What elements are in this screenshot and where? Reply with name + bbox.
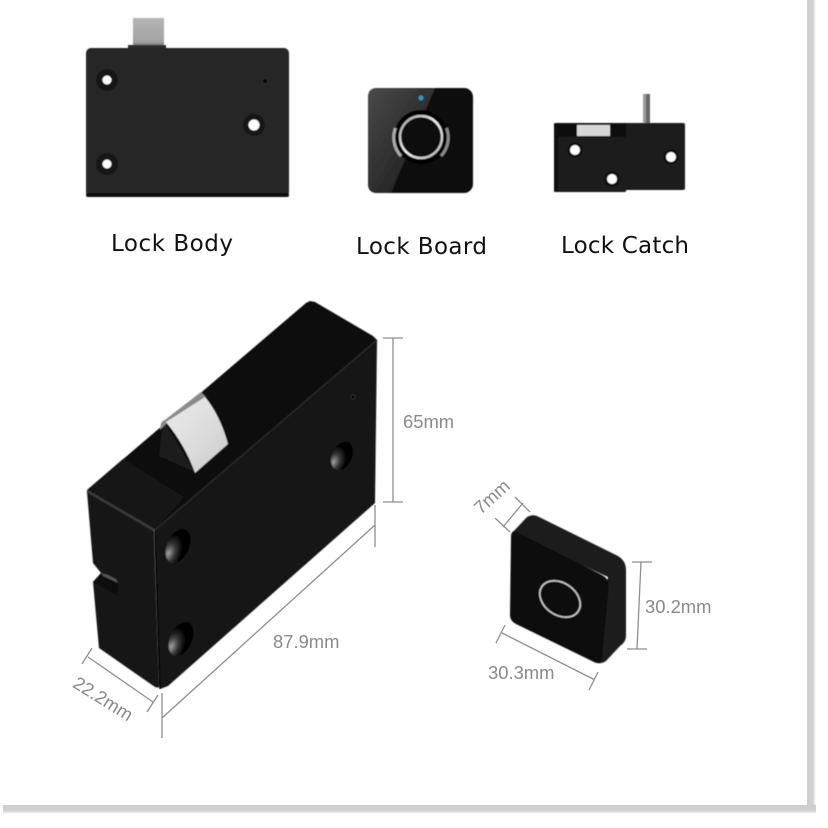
lock catch photo xyxy=(554,94,685,192)
large lock body 3D view xyxy=(87,301,377,689)
label: lock body: Lock Body xyxy=(111,231,233,257)
dimension: 65mm xyxy=(383,338,454,502)
top face xyxy=(87,301,377,530)
latch polished face xyxy=(166,397,228,473)
screw holes xyxy=(160,525,196,567)
front face xyxy=(510,531,609,663)
top and side faces xyxy=(512,515,626,663)
side face edge highlight xyxy=(87,491,154,530)
label: lock board: Lock Board xyxy=(356,234,487,260)
label: lock catch: Lock Catch xyxy=(561,233,689,259)
dimension: 87.9mm xyxy=(162,505,375,738)
dimension: 30.2mm xyxy=(627,562,711,649)
dimension: 87.9mm: 87.9mm xyxy=(273,631,339,652)
notch recess xyxy=(93,573,118,596)
lock board photo xyxy=(368,88,473,193)
dimension: 65mm: 65mm xyxy=(403,411,454,432)
latch recess xyxy=(153,427,230,484)
fingerprint ring xyxy=(533,573,587,625)
small lock board 3D view xyxy=(510,515,626,663)
dimension: 30.2mm: 30.2mm xyxy=(645,596,711,617)
dimension: 22.2mm: 22.2mm xyxy=(70,672,137,725)
dimension: 7mm xyxy=(469,475,530,532)
lock body photo xyxy=(86,18,289,197)
dimension: 30.3mm: 30.3mm xyxy=(488,662,554,683)
front face xyxy=(155,340,377,689)
latch black wedge xyxy=(159,420,195,472)
dimension: 30.3mm xyxy=(488,625,598,690)
dimension: 7mm: 7mm xyxy=(469,475,514,518)
dimension: 22.2mm xyxy=(70,648,158,725)
side face with notch xyxy=(87,492,159,688)
